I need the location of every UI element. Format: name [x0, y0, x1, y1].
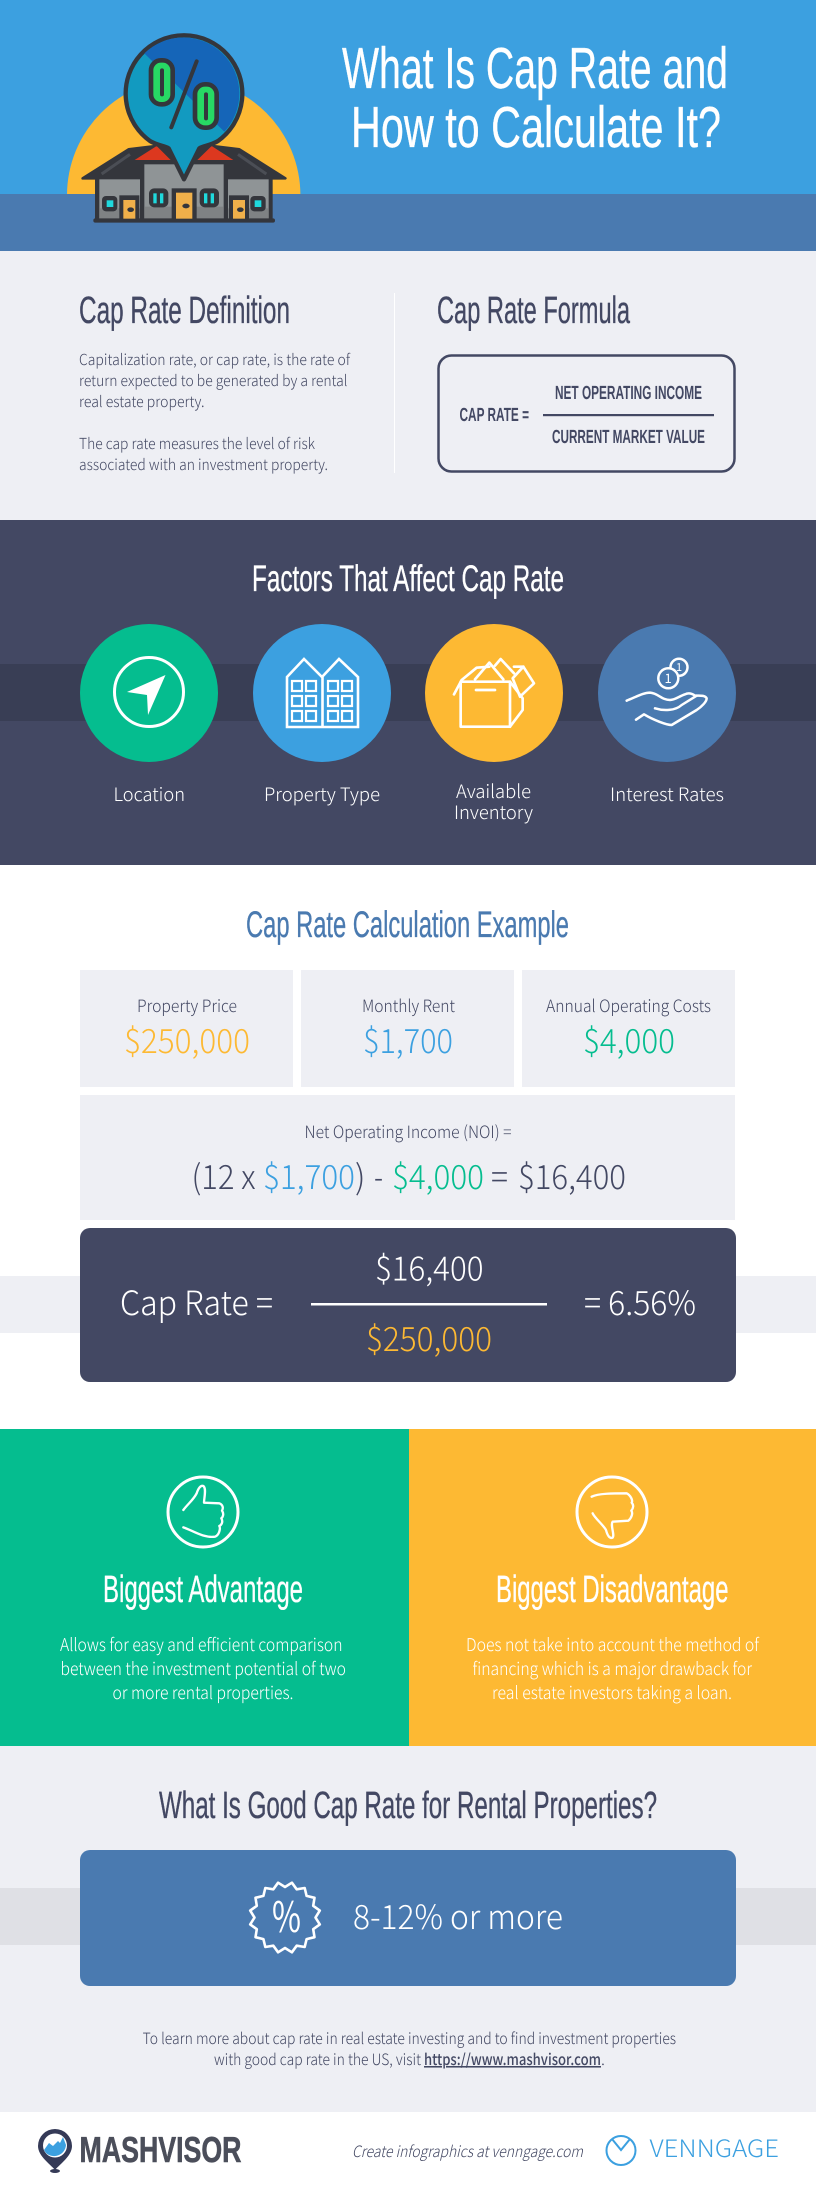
text: definition: return expected to be generated by a rental: [79, 369, 348, 391]
heading: calculation example: Cap Rate Calculation Example: [246, 904, 569, 945]
title: [342, 36, 728, 160]
logo: mashvisor: [38, 2129, 242, 2173]
icon: sun behind house: [67, 79, 300, 312]
text: disadvantage: Does not take into account the method of: [466, 1632, 760, 1657]
card: property price: [80, 970, 293, 1087]
card: net operating income: ): [355, 1150, 366, 1199]
text: learn more: To learn more about cap rate in real estate investing and to find investment properties: [143, 2027, 676, 2049]
factor: property type: Property Type: [264, 781, 380, 807]
formula box: CAP RATE =: [460, 405, 529, 426]
formula box: NET OPERATING INCOME: [555, 383, 702, 404]
panel: biggest advantage: [0, 1429, 409, 1746]
formula box: [438, 356, 734, 472]
factor: location: [80, 624, 218, 807]
card: net operating income: (12 x: [192, 1150, 256, 1199]
text: learn more: [143, 2027, 676, 2070]
text: disadvantage: [466, 1632, 760, 1705]
formula box: CURRENT MARKET VALUE: [552, 427, 705, 448]
panel: factors that affect cap rate: [0, 520, 816, 865]
heading: cap rate formula: Cap Rate Formula: [437, 290, 631, 332]
text: definition: real estate property.: [79, 390, 204, 412]
card: net operating income: -: [374, 1150, 383, 1199]
heading: factors: Factors That Affect Cap Rate: [252, 558, 564, 599]
panel: footer: [0, 2112, 816, 2192]
header band: [0, 194, 816, 251]
card: net operating income: $1,700: [263, 1150, 355, 1199]
icon: thumbs down: [577, 1477, 647, 1547]
card: net operating income: $4,000: [392, 1150, 484, 1199]
text: advantage: or more rental properties.: [112, 1680, 294, 1705]
icon: percent badge: [250, 1883, 320, 1952]
factor: available inventory: Available: [456, 778, 531, 804]
panel: header: [0, 0, 816, 312]
card: net operating income: =: [491, 1150, 508, 1199]
factor: interest rates: 1: [664, 668, 672, 687]
card: cap rate result: = 6.56%: [584, 1276, 696, 1325]
text: definition: The cap rate measures the level of risk: [79, 432, 315, 454]
text: learn more: .: [601, 2048, 605, 2070]
panel: biggest disadvantage: [409, 1429, 816, 1746]
card: annual operating costs: $4,000: [583, 1014, 675, 1063]
text: definition: [79, 348, 350, 475]
card: property price: Property Price: [137, 992, 237, 1017]
factor: location: Location: [114, 781, 185, 807]
icon: percent badge: %: [272, 1884, 301, 1945]
text: advantage: Allows for easy and efficient comparison: [60, 1632, 342, 1657]
text: advantage: [60, 1632, 346, 1705]
icon: thumbs up: [168, 1477, 238, 1547]
panel: good cap rate: [0, 1746, 816, 2112]
card: cap rate result: $16,400: [375, 1242, 484, 1290]
card: net operating income: Net Operating Income (NOI) =: [304, 1118, 512, 1143]
logo: mashvisor: MASHVISOR: [80, 2129, 242, 2170]
card: cap rate result: $250,000: [366, 1312, 492, 1361]
card: net operating income: [80, 1095, 735, 1220]
card: cap rate result: [80, 1228, 736, 1382]
card: annual operating costs: Annual Operating Costs: [546, 992, 711, 1017]
factor: available inventory: [425, 624, 563, 825]
card: monthly rent: $1,700: [363, 1014, 453, 1063]
card: annual operating costs: [522, 970, 735, 1087]
text: learn more: with good cap rate in the US, visit: [214, 2048, 421, 2070]
panel: definition and formula: [0, 251, 816, 520]
text: definition: Capitalization rate, or cap rate, is the rate of: [79, 348, 350, 370]
callout: 8-12% or more: 8-12% or more: [353, 1890, 563, 1939]
text: definition: associated with an investment property.: [79, 453, 328, 475]
card: cap rate result: Cap Rate =: [120, 1276, 273, 1325]
heading: cap rate definition: Cap Rate Definition: [79, 290, 290, 332]
factor: available inventory: Inventory: [454, 799, 533, 825]
card: monthly rent: [301, 970, 514, 1087]
text: disadvantage: financing which is a major drawback for: [472, 1656, 753, 1681]
factor: interest rates: [598, 624, 736, 807]
card: net operating income: $16,400: [518, 1150, 626, 1199]
factor: interest rates: 1: [676, 659, 682, 675]
text: learn more: https://www.mashvisor.com: [424, 2048, 601, 2070]
panel: calculation example: [0, 865, 816, 1429]
heading: biggest advantage: Biggest Advantage: [103, 1569, 303, 1611]
factor: property type: [253, 624, 391, 807]
logo: venngage: [606, 2129, 779, 2165]
logo: venngage: VENNGAGE: [650, 2129, 779, 2164]
icon: percent pin over houses: [83, 35, 285, 223]
card: property price: $250,000: [124, 1014, 250, 1063]
callout: 8-12% or more: [80, 1850, 736, 1986]
factor: interest rates: Interest Rates: [610, 781, 724, 807]
card: monthly rent: Monthly Rent: [362, 992, 455, 1017]
text: venngage credit: Create infographics at venngage.com: [352, 2140, 584, 2162]
text: advantage: between the investment potential of two: [60, 1656, 346, 1681]
text: disadvantage: real estate investors taking a loan.: [492, 1680, 732, 1705]
